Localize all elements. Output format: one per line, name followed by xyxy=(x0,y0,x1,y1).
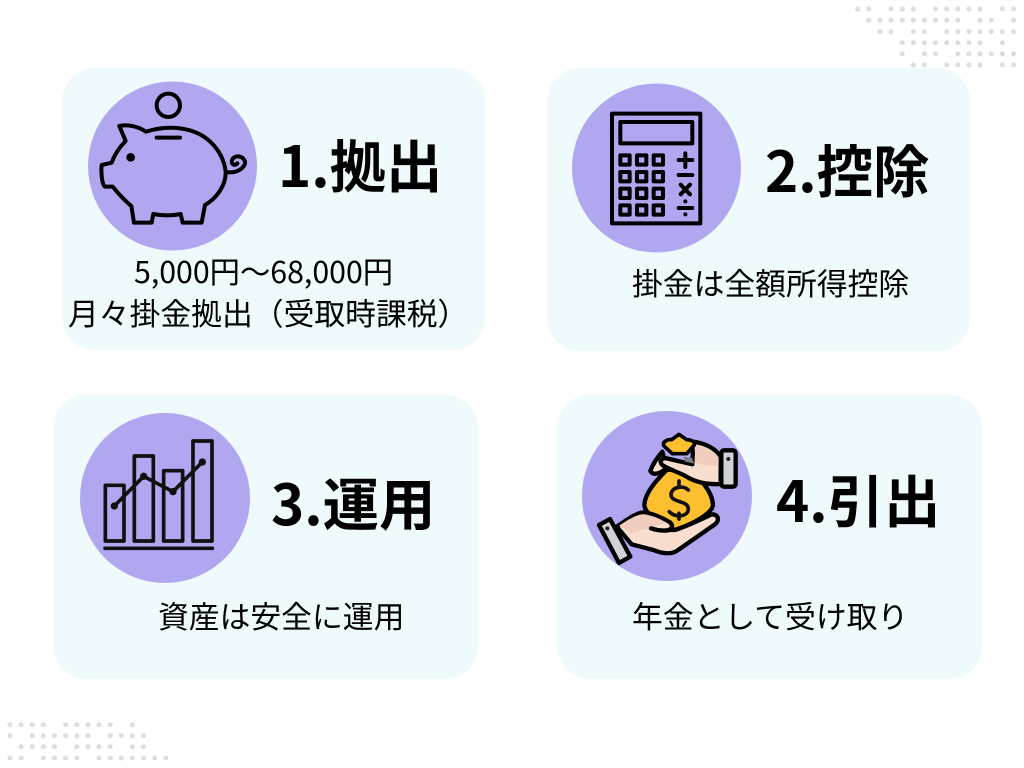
icon: calculator xyxy=(612,114,700,223)
text: investment description: 資産は安全に運用 xyxy=(158,592,404,637)
icon: bar and line chart xyxy=(105,441,212,548)
text: withdrawal description: 年金として受け取り xyxy=(632,592,908,637)
panel: 3 investment xyxy=(53,395,478,679)
panel: 4 withdrawal xyxy=(557,395,982,679)
text: contribution amount: 5,000円～68,000円 xyxy=(134,248,393,292)
icon: hands passing money bag xyxy=(599,434,736,563)
panel: 1 contribution xyxy=(62,68,485,350)
panel: 2 deduction xyxy=(547,68,970,351)
heading: 2: 2.控除 xyxy=(765,128,929,209)
text: contribution description: 月々掛金拠出（受取時課税） xyxy=(68,289,468,334)
heading: 3: 3.運用 xyxy=(271,461,435,542)
heading: 4: 4.引出 xyxy=(776,458,940,539)
heading: 1: 1.拠出 xyxy=(278,123,442,204)
icon: piggy bank xyxy=(101,94,245,223)
text: deduction description: 掛金は全額所得控除 xyxy=(632,259,909,304)
